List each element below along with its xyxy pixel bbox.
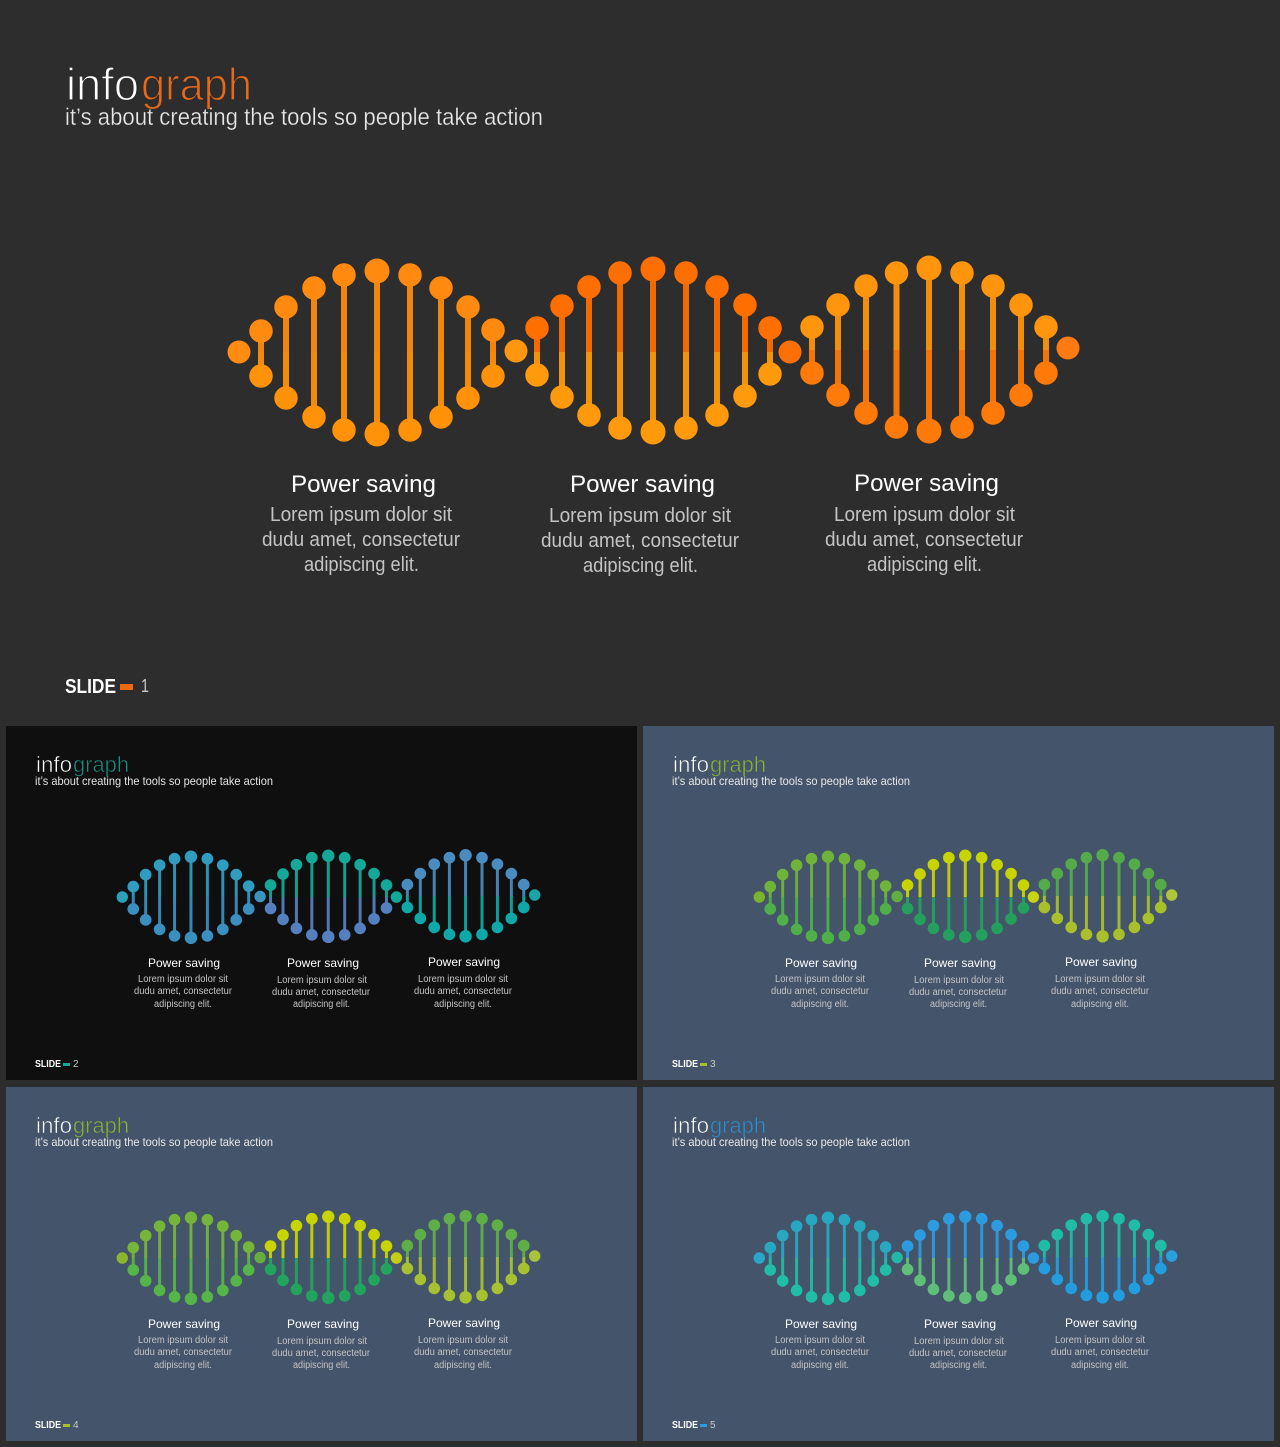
slide 2 column 2 text [272,956,371,1010]
title: graph [141,59,252,110]
slide 4 number: 4 [73,1420,79,1431]
slide 4 background [6,1087,637,1441]
chart: DNA helix, blue and green [754,1216,1177,1299]
slide 2 column 3 text: Lorem ipsum dolor sit [418,974,508,985]
text block: column 1: Lorem ipsum dolor sit [270,504,452,526]
slide 3 column 1 text: dudu amet, consectetur [771,986,870,997]
slide 4 column 1 text: Lorem ipsum dolor sit [138,1335,228,1346]
helix 2 upper half [537,269,770,352]
panel: slide 5 [643,1087,1274,1441]
text block: column 1: dudu amet, consectetur [262,529,460,551]
helix 1 lower half [261,352,493,434]
slide 5 column 2 text: Lorem ipsum dolor sit [914,1336,1004,1347]
slide 2 column 1 text: Lorem ipsum dolor sit [138,974,228,985]
slide 5 column 1 text: adipiscing elit. [791,1360,849,1371]
slide 2 column 2 text: Power saving [287,956,359,970]
slide 4 column 1 text: Power saving [148,1317,220,1331]
slide 4 number [35,1420,79,1431]
subtitle: it’s about creating the tools so people take action [65,104,543,131]
helix 1 upper half [261,271,493,352]
slide 4 title [36,1113,129,1138]
slide 3 column 3 text: adipiscing elit. [1071,999,1129,1010]
slide 5 title: info [673,1113,709,1138]
slide 3 column 1 text: Power saving [785,956,857,970]
text block: column 1: adipiscing elit. [304,554,419,576]
slide 5 column 3 text: Power saving [1065,1316,1137,1330]
text block: column 2: Lorem ipsum dolor sit [549,505,731,527]
slide 2 number: 2 [73,1059,79,1070]
slide 2 column 1 text: dudu amet, consectetur [134,986,233,997]
slide 2 title [36,752,129,777]
slide 5 column 3 text: adipiscing elit. [1071,1360,1129,1371]
slide 4 column 2 text: dudu amet, consectetur [272,1348,371,1359]
chart: DNA helix, blue and teal [117,855,540,938]
slide 2 column 2 text: dudu amet, consectetur [272,987,371,998]
slide 3 background [643,726,1274,1080]
slide 2 background [6,726,637,1080]
slide 2 title: graph [73,752,129,777]
slide number: 1 [141,676,149,696]
slide 4 column 3 text: adipiscing elit. [434,1360,492,1371]
slide 3 column 1 text: Lorem ipsum dolor sit [775,974,865,985]
text block: column 3 [825,470,1023,576]
text block: column 2: Power saving [570,471,715,498]
text block: column 3: Power saving [854,470,999,497]
slide 2 column 2 text: Lorem ipsum dolor sit [277,975,367,986]
slide 5 column 1 text: Power saving [785,1317,857,1331]
panel: slide 1 [65,59,1080,698]
slide 5 column 3 text: dudu amet, consectetur [1051,1347,1150,1358]
slide 2 column 3 text: Power saving [428,955,500,969]
slide 3 column 2 text [909,956,1008,1010]
slide 5 number: SLIDE [672,1420,698,1431]
slide 2 title: info [36,752,72,777]
title [66,59,252,110]
slide 4 column 1 text [134,1317,233,1371]
text block: column 3: Lorem ipsum dolor sit [834,504,1015,526]
slide 3 column 3 text [1051,955,1150,1010]
panel: slide 4 [6,1087,637,1441]
slide 4 title: info [36,1113,72,1138]
slide 4 column 3 text: dudu amet, consectetur [414,1347,513,1358]
slide 4 column 2 text: adipiscing elit. [293,1360,350,1371]
slide 3 number: 3 [710,1059,716,1070]
slide 2 column 2 text: adipiscing elit. [293,999,350,1010]
slide 3 column 2 text: Power saving [924,956,996,970]
slide 2 number [35,1059,79,1070]
slide 2 column 3 text [414,955,513,1010]
panel: slide 3 [643,726,1274,1080]
slide 4 column 2 text: Lorem ipsum dolor sit [277,1336,367,1347]
panel: slide 2 [6,726,637,1080]
slide 3 title [673,752,766,777]
slide 3 number [672,1059,716,1070]
text block: column 2: dudu amet, consectetur [541,530,739,552]
slide 2 column 1 text [134,956,233,1010]
slide 5 title: graph [710,1113,766,1138]
slide 3 column 1 text [771,956,870,1010]
slide 3 title: graph [710,752,766,777]
slide 2 subtitle: it’s about creating the tools so people take action [35,774,273,788]
text block: column 3: adipiscing elit. [867,554,982,576]
slide 3 column 3 text: Power saving [1065,955,1137,969]
slide 5 column 1 text: dudu amet, consectetur [771,1347,870,1358]
slide 5 subtitle: it’s about creating the tools so people take action [672,1135,910,1149]
text block: column 2 [541,471,739,577]
helix 2 lower half [537,352,770,432]
slide 3 column 1 text: adipiscing elit. [791,999,849,1010]
slide 3 column 2 text: dudu amet, consectetur [909,987,1008,998]
slide 2 number: SLIDE [35,1059,61,1070]
junction dots [228,336,1080,364]
slide 2 column 3 text: dudu amet, consectetur [414,986,513,997]
slide 5 column 2 text: adipiscing elit. [930,1360,987,1371]
slide 4 column 3 text [414,1316,513,1371]
slide 4 column 1 text: dudu amet, consectetur [134,1347,233,1358]
slide 5 column 2 text: dudu amet, consectetur [909,1348,1008,1359]
slide 5 column 2 text: Power saving [924,1317,996,1331]
chart: DNA helix, green and lime [754,855,1177,938]
slide 5 column 1 text: Lorem ipsum dolor sit [775,1335,865,1346]
slide 4 column 3 text: Lorem ipsum dolor sit [418,1335,508,1346]
helix 3 lower half [812,350,1046,431]
slide 3 column 3 text: dudu amet, consectetur [1051,986,1150,997]
slide 3 column 2 text: adipiscing elit. [930,999,987,1010]
slide 4 title: graph [73,1113,129,1138]
slide 5 background [643,1087,1274,1441]
slide 2 column 3 text: adipiscing elit. [434,999,492,1010]
text block: column 1 [262,471,460,576]
chart: DNA helix, orange [228,268,1080,434]
slide 2 column 1 text: Power saving [148,956,220,970]
slide 2 column 1 text: adipiscing elit. [154,999,212,1010]
slide 4 number: SLIDE [35,1420,61,1431]
slide 4 subtitle: it’s about creating the tools so people take action [35,1135,273,1149]
slide 5 column 3 text: Lorem ipsum dolor sit [1055,1335,1145,1346]
chart: DNA helix, green and yellow [117,1216,540,1299]
slide 4 column 2 text [272,1317,371,1371]
slide 5 title [673,1113,766,1138]
text block: column 3: dudu amet, consectetur [825,529,1023,551]
text block: column 2: adipiscing elit. [583,555,698,577]
slide 5 column 2 text [909,1317,1008,1371]
title: info [66,59,139,110]
slide 3 column 2 text: Lorem ipsum dolor sit [914,975,1004,986]
slide 5 number: 5 [710,1420,716,1431]
slide 3 subtitle: it’s about creating the tools so people take action [672,774,910,788]
slide 4 column 3 text: Power saving [428,1316,500,1330]
slide 4 column 1 text: adipiscing elit. [154,1360,212,1371]
slide number: SLIDE [65,676,116,698]
slide 3 number: SLIDE [672,1059,698,1070]
slide 4 column 2 text: Power saving [287,1317,359,1331]
slide 3 title: info [673,752,709,777]
text block: column 1: Power saving [291,471,436,498]
slide 5 column 1 text [771,1317,870,1371]
helix 3 upper half [812,268,1046,350]
slide 5 column 3 text [1051,1316,1150,1371]
slide 3 column 3 text: Lorem ipsum dolor sit [1055,974,1145,985]
slide 5 number [672,1420,716,1431]
